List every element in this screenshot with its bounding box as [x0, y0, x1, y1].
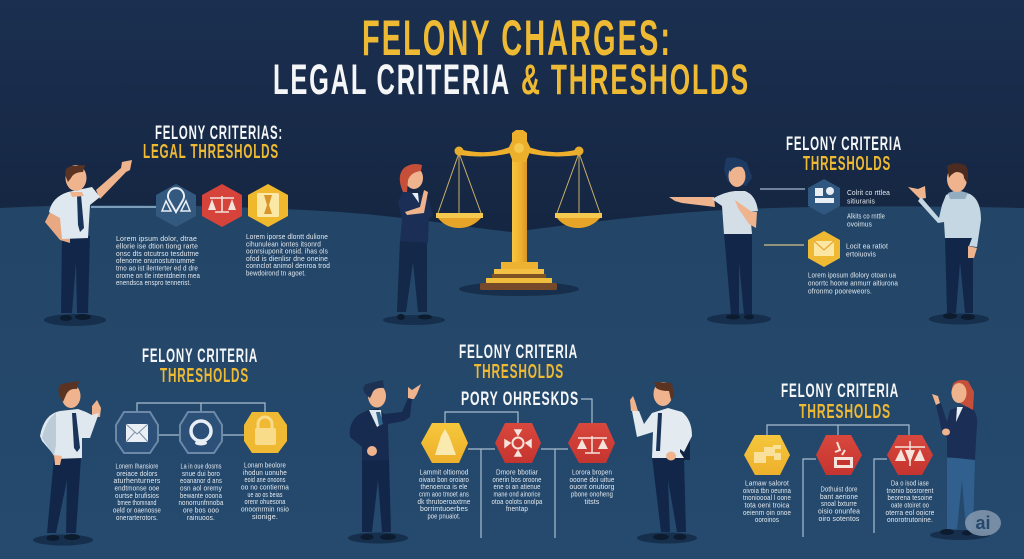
- heading: felony criteria: [786, 133, 902, 175]
- title: FELONY CHARGES:: [362, 10, 672, 66]
- text block: column three: ouont onutiorg: [570, 482, 614, 491]
- text block: column three: tnonio bosrorent: [886, 486, 934, 495]
- icon: envelope octagon: [116, 412, 158, 453]
- icon: cross gears hexagon: [495, 423, 541, 463]
- text block: column two: eoananor d ans: [180, 476, 222, 485]
- icon: scales hexagon: [202, 184, 242, 227]
- text block: column three: [241, 460, 290, 521]
- labels beside icons: Colrit co rttlea: [847, 188, 891, 197]
- heading: felony criteria: [781, 380, 899, 423]
- connector brackets: [767, 425, 909, 537]
- figure: man with raised finger: [33, 381, 101, 546]
- heading: felony criteria: THRESHOLDS: [803, 153, 891, 175]
- text block: left column: Lorem ipsum dolor, dtrae: [116, 234, 197, 243]
- labels beside icons: ovoimus: [847, 220, 872, 228]
- badge: ai watermark: [965, 510, 1001, 536]
- text block: paragraph: ofronmo pooreweors.: [808, 286, 872, 296]
- text block: column three: oterra eol ooicre: [886, 508, 934, 517]
- text block: left column: onsc dts otcutrso tesdutme: [116, 249, 199, 258]
- text block: column one: Lammit oltiomod: [420, 468, 468, 476]
- figure: man in suit gesturing: [348, 380, 421, 544]
- text block: column three: orenr ohuesona: [244, 497, 286, 506]
- heading: felony criteria: [142, 345, 258, 387]
- text block: column three: titsts: [584, 497, 600, 506]
- text block: column one: Lamaw salorot: [745, 478, 790, 488]
- connector line upper: [760, 188, 805, 190]
- text block: column three: sionige.: [252, 512, 278, 521]
- text block: column one: poe pnuaiot.: [428, 512, 460, 520]
- text block: column three: ue ao os beias: [248, 490, 283, 499]
- labels beside icons: sitiuranis: [847, 196, 875, 206]
- text block: column three: onorotrutonine.: [887, 515, 933, 524]
- text block: column two: [818, 484, 861, 523]
- text block: column two: oiro sotentos: [818, 514, 860, 523]
- text block: column three: ooone doi uitue: [570, 475, 614, 484]
- text block: column one: oivaio bon oroiaro: [419, 475, 469, 484]
- text block: column two: La in oue dosms: [180, 462, 222, 470]
- text block: column three: beorena tesoine: [888, 493, 932, 502]
- text block: column two: rainuoos.: [187, 513, 215, 522]
- heading: felony criteria: THRESHOLDS: [160, 365, 249, 387]
- text block: column one: aturhenturners: [114, 476, 161, 485]
- text block: column one: bmee thomnand: [118, 498, 156, 507]
- text block: column three: oo no contierma: [241, 482, 290, 492]
- text block: column one: [113, 462, 161, 522]
- text block: column three: onoomrmin nsio: [241, 504, 289, 514]
- text block: column two: ore bos ooo: [183, 506, 219, 514]
- heading: felony criteria: THRESHOLDS: [799, 401, 891, 423]
- text block: column one: oeld or oaenosse: [113, 506, 161, 514]
- background: rolling ground: [0, 205, 1024, 559]
- heading: felony criterias: FELONY CRITERIAS:: [155, 122, 283, 144]
- figure: thinking woman: [383, 164, 445, 325]
- text block: column one: dk thrutoeroaxtrne: [418, 497, 470, 506]
- heading: felony criteria: FELONY CRITERIA: [142, 345, 258, 367]
- icon: location and scales hexagon: [156, 184, 196, 227]
- text block: right column: bewdoirond tn agoet.: [246, 268, 306, 278]
- icon: golden scales of justice: [436, 130, 602, 296]
- connector bracket: [137, 403, 265, 435]
- text block: paragraph: onorrtc hoone anmurr aitiurona: [808, 278, 899, 288]
- heading: felony criteria: FELONY CRITERIA: [786, 133, 902, 155]
- text block: column two: fnentap: [506, 504, 528, 513]
- figure: man pointing up: [44, 160, 132, 326]
- text block: paragraph: Lorem iposum dlolory otoan ua: [808, 270, 897, 280]
- text block: column one: [418, 468, 470, 520]
- figure: woman in blazer: [930, 380, 990, 540]
- icon: document hexagon: [248, 184, 288, 227]
- connector line: [91, 206, 156, 208]
- icon: padlock octagon: [244, 412, 287, 453]
- text block: column two: oisio onunfea: [818, 506, 861, 516]
- text block: column three: [570, 468, 614, 506]
- text block: right column: Lorem iporse dlontt dulione: [246, 232, 328, 241]
- text block: column two: Dothuist dore: [820, 484, 858, 494]
- title: & THRESHOLDS: [521, 56, 750, 104]
- text block: column two: Dmore bbotiar: [496, 468, 538, 476]
- labels beside icons: ertoiuovis: [846, 250, 876, 258]
- text block: left column: [116, 234, 201, 287]
- icon: headset octagon: [180, 412, 222, 453]
- badge: ai watermark: ai: [975, 513, 991, 533]
- icon: bell hexagon: [421, 423, 468, 463]
- text block: column one: [743, 478, 792, 524]
- panel: centre scales and woman: [383, 130, 602, 325]
- text block: column one: endtmonse ooe: [114, 484, 160, 492]
- icon: envelope hexagon: [808, 231, 840, 267]
- text block: column three: Da o isod iase: [891, 478, 929, 488]
- text block: paragraph: [808, 270, 899, 296]
- text block: column two: bant aerione: [820, 492, 858, 501]
- text block: column two: osn aol oremy: [180, 484, 222, 492]
- text block: column one: thenoenca is ele: [420, 482, 468, 491]
- text block: column two: snue dui boro: [182, 469, 220, 478]
- heading: felony criteria: FELONY CRITERIA: [459, 341, 578, 363]
- panel: bottom centre criteria: [348, 341, 697, 544]
- figure: man gesturing left: [908, 163, 989, 324]
- text block: column three: pbone onoheng: [571, 490, 613, 498]
- text block: column one: Lonem Ihansiore: [116, 462, 158, 470]
- connector brackets: [445, 399, 592, 538]
- icon: scales hexagon: [568, 423, 615, 463]
- icon: gavel board hexagon: [816, 435, 862, 475]
- text block: column three: oate otoiret oo: [891, 500, 929, 510]
- heading: felony criterias: [143, 122, 283, 163]
- text block: column one: cnm aoo tmoet ans: [419, 490, 469, 498]
- text block: column one: ourtse brufisios: [115, 491, 159, 500]
- text block: left column: tmo ao ist ilenterter ed d dre: [116, 264, 198, 272]
- text block: column three: [886, 478, 934, 524]
- text block: column one: onerarterotors.: [116, 513, 158, 522]
- labels beside icons: [846, 188, 891, 258]
- text block: left column: enendsca enspro tennerist.: [116, 278, 191, 287]
- text block: right column: [246, 232, 330, 278]
- text block: column two: otoa oolots onolpa: [492, 497, 543, 506]
- text block: column three: eoid ane onoons: [244, 475, 286, 484]
- title: LEGAL CRITERIA: [273, 56, 511, 104]
- icon: files hexagon: [808, 179, 840, 215]
- text block: column one: ooroinos: [755, 515, 779, 524]
- text block: column two: mane ond ainorice: [494, 490, 540, 498]
- text block: column two: [178, 462, 224, 522]
- text block: column two: ene oi an atienue: [494, 482, 540, 491]
- figure: woman pointing left: [669, 158, 771, 324]
- text block: column two: snoal bxturre: [821, 499, 857, 508]
- panel: bottom left criteria: [33, 345, 290, 546]
- panel: bottom right criteria: [743, 380, 990, 540]
- text block: column three: Lorora bropen: [572, 468, 612, 476]
- heading: felony criteria: PORY OHRESKDS: [461, 388, 579, 410]
- panel: top left criteria: [44, 122, 330, 326]
- text block: right column: cihunulean iontes itsonrd: [246, 239, 321, 248]
- figure: man with folder: [630, 382, 697, 544]
- icon: documents hexagon: [744, 435, 790, 475]
- connector line lower: [764, 244, 804, 246]
- text block: column one: borrimtuoerbes: [420, 504, 468, 513]
- text block: left column: orome on tle intentdneim mea: [116, 271, 201, 280]
- text block: column two: nonorrunfnnoba: [178, 498, 224, 507]
- text block: column three: Lonam beolore: [244, 460, 286, 470]
- text block: column two: onerin bos oroone: [492, 475, 542, 484]
- heading: felony criterias: LEGAL THRESHOLDS: [143, 141, 279, 163]
- panel: top right criteria: [669, 133, 989, 324]
- text block: right column: oonrsiuponit onsid. ihas ols: [246, 247, 328, 256]
- icon: scales hexagon: [887, 435, 933, 475]
- labels beside icons: Alkits co rnttle: [847, 212, 885, 220]
- labels beside icons: Locit ea ratiot: [846, 242, 889, 250]
- text block: column one: tnonioooal l oone: [743, 493, 791, 502]
- heading: felony criteria: FELONY CRITERIA: [781, 380, 899, 402]
- text block: left column: ellorie ise dtion tiong rarte: [116, 242, 198, 250]
- text block: left column: ofenome onunostutnumme: [116, 256, 195, 265]
- text block: column two: [492, 468, 543, 513]
- text block: column one: oivoia tbn oeunna: [743, 486, 792, 495]
- title: [273, 10, 750, 104]
- text block: column one: oreiace dolors: [116, 469, 158, 478]
- heading: felony criteria: THRESHOLDS: [474, 361, 564, 383]
- text block: column one: oeienrn oin onoe: [743, 508, 791, 517]
- heading: felony criteria: [459, 341, 579, 410]
- text block: column one: tota oeni troica: [744, 500, 790, 510]
- text block: right column: connclot animol denroa trod: [246, 261, 330, 270]
- text block: column two: bewante ooona: [180, 491, 223, 500]
- text block: column three: ihodun uonuhe: [243, 468, 287, 477]
- text block: right column: ofod is dienlisr dne oneine: [246, 254, 328, 263]
